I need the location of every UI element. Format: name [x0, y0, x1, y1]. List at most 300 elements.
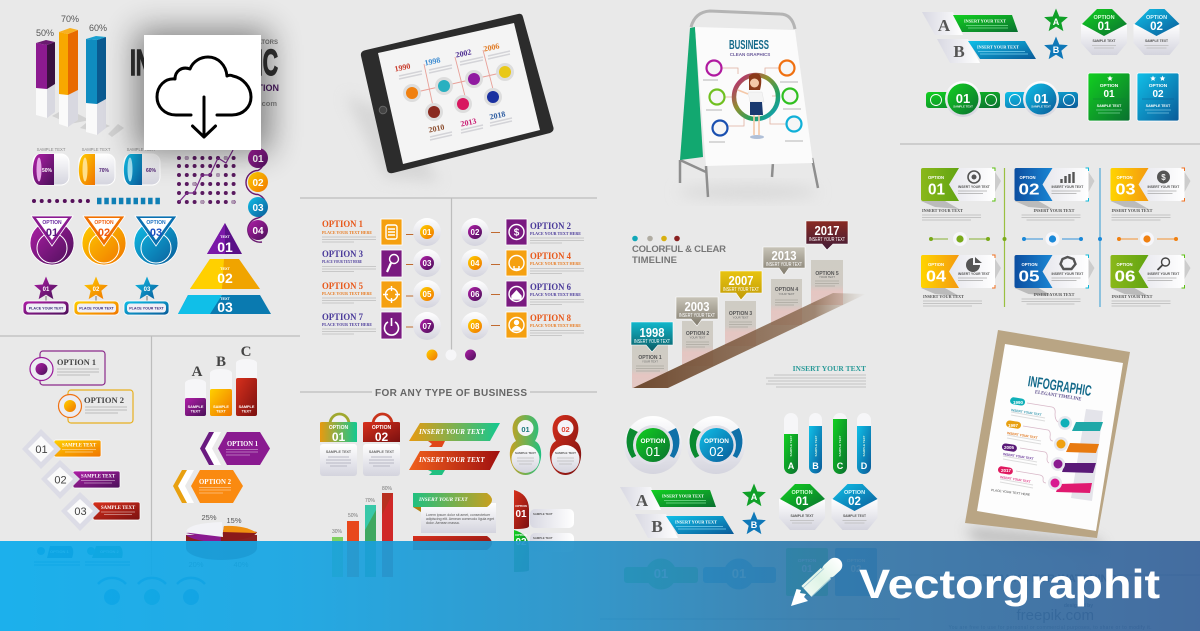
right option column: [530, 222, 581, 328]
pyramid chart: 02: [217, 270, 233, 286]
tablet screen: [378, 23, 540, 164]
panel: percentage cylinders: SAMPLE TEXT: [37, 147, 66, 152]
poster year pills: 1990: [1013, 400, 1024, 405]
panel: capsule chart A-D: [784, 413, 871, 474]
repeated option B banner: B: [651, 517, 663, 536]
tablet shadow: [345, 95, 440, 182]
icon: cloud download: [157, 57, 251, 137]
repeated star cards under banner: 01: [801, 564, 813, 575]
panel: option 1 and 2 outlined cards: OPTION 1: [57, 357, 96, 367]
pyramid chart: [178, 223, 271, 315]
panel: vertical tab list: 02: [515, 537, 527, 548]
option triangle badges: [30, 216, 178, 265]
panel: colorful timeline: OPTION 5: [815, 271, 839, 277]
option A banner: A: [938, 16, 951, 35]
bar label 50%: 50%: [36, 28, 54, 38]
winged circle green: 01: [956, 91, 970, 106]
star B: B: [1053, 45, 1060, 55]
card 05: OPTION: [1022, 262, 1038, 267]
sign green side panel: [680, 27, 703, 160]
panel: percentage cylinders: [33, 147, 160, 185]
panel: tag cards: SAMPLE TEXT: [369, 450, 395, 454]
star card option 01: [1088, 73, 1130, 121]
pyramid chart: TEXT: [220, 297, 231, 301]
panel: A B C cylinders: C: [241, 344, 251, 360]
star card option 02: 02: [1152, 89, 1164, 100]
card 05: [1014, 255, 1094, 304]
star labels: 02: [93, 287, 100, 293]
card 01: OPTION: [928, 175, 944, 180]
brand wordmark: Vectorgraphit: [859, 561, 1160, 607]
bar label 60%: 60%: [89, 23, 107, 33]
ghost content beneath banner: freepik.com: [1016, 607, 1094, 624]
hexagon option 01: 01: [1098, 21, 1111, 33]
panel: A/B options top right: [922, 8, 1180, 121]
repeated star B: [742, 512, 766, 534]
panel: tag cards: 02: [375, 430, 388, 444]
repeated hexagon 01: 01: [796, 496, 809, 508]
panel: colorful timeline: 2013: [772, 248, 796, 263]
winged circle blue: [1005, 81, 1078, 117]
panel: capsule chart A-D: SAMPLE TEXT: [814, 435, 818, 457]
poster year pills: 2005: [1004, 445, 1015, 450]
panel: options 1-8: [322, 218, 584, 360]
repeated star cards under banner: OPTION: [798, 558, 817, 564]
card 05: INSERT YOUR TEXT: [1052, 272, 1083, 276]
panel: peanut option shapes: SAMPLE TEXT: [515, 451, 536, 455]
ghost content beneath banner: OPTION 1: [50, 549, 69, 554]
pyramid chart: 03: [217, 299, 233, 315]
timeline caption: INSERT YOUR TEXT: [793, 364, 866, 373]
icon glyphs in squares: [383, 224, 524, 335]
option A banner: [922, 12, 1018, 35]
card 05: INSERT YOUR TEXT: [1034, 292, 1075, 297]
panel: tablet timeline mockup: [345, 14, 554, 182]
panel: A B C cylinders: SAMPLE: [188, 405, 204, 409]
pagination dots: [426, 350, 476, 360]
panel: colorful timeline: 1998: [640, 325, 664, 340]
repeated star A: A: [751, 492, 758, 502]
repeated option A banner: INSERT YOUR TEXT: [662, 494, 704, 498]
panel: vertical tab list: OPTION: [515, 533, 527, 537]
bottom banner: [0, 541, 1200, 631]
tablet timeline: 2018: [489, 109, 506, 122]
numbered circles: [413, 218, 489, 340]
card 01: INSERT YOUR TEXT: [922, 208, 963, 213]
poster year pills: [997, 397, 1026, 475]
option B banner: [937, 39, 1036, 63]
card 01: [921, 168, 1001, 220]
left option column: OPTION 5: [322, 282, 363, 292]
panel: colorful timeline: OPTION 2: [686, 331, 709, 337]
poster captions: [991, 408, 1045, 497]
panel: colorful timeline: INSERT YOUR TEXT: [766, 262, 802, 268]
heading behind the download overlay: ILLUSTRATORS: [232, 40, 278, 46]
star A: A: [1053, 17, 1060, 27]
option triangle badges: OPTION: [146, 220, 166, 226]
legend dots: [632, 236, 680, 241]
hexagon option 01: OPTION: [1093, 15, 1115, 21]
panel: tag cards: SAMPLE TEXT: [326, 450, 352, 454]
timeline caption: [766, 364, 866, 387]
star card option 01: OPTION: [1100, 83, 1119, 89]
panel: capsule chart A-D: D: [861, 461, 868, 471]
kraft board: [965, 330, 1130, 538]
panel: A B C cylinders: TEXT: [216, 410, 227, 414]
panel: options 1-8: 01: [423, 228, 432, 237]
panel: options 1-8: 05: [423, 290, 432, 299]
panel: colorful timeline: 2003: [684, 299, 710, 314]
dot matrix line chart: [179, 150, 236, 204]
repeated hexagon 01: [779, 484, 825, 530]
panel: 3D percentage bars: [36, 14, 124, 137]
card 06: OPTION: [1116, 262, 1133, 267]
star card option 02: [1137, 73, 1179, 121]
sign heading: BUSINESS: [729, 37, 769, 52]
timeline heading: TIMELINE: [632, 255, 677, 266]
poster ribbons: [1048, 416, 1103, 493]
panel: capsule chart A-D: SAMPLE TEXT: [862, 435, 866, 457]
icon: pencil logo: [791, 565, 835, 606]
panel: percentage cylinders: 50%: [42, 168, 53, 174]
card 03: INSERT YOUR TEXT: [1112, 208, 1153, 213]
panel: diamond numbered tags: [22, 429, 140, 531]
heading behind the download overlay: [130, 40, 279, 108]
option triangle badges: 01: [46, 227, 58, 239]
panel: options 1-8: 04: [471, 259, 480, 268]
panel: insert your text cards: adipiscing elit. Aenean commodo ligula eget: [426, 517, 494, 521]
card 06: INSERT YOUR TEXT: [1112, 294, 1153, 299]
card 04: 04: [926, 268, 946, 286]
repeated star A: [742, 484, 766, 506]
panel: peanut option shapes: [510, 415, 581, 475]
panel: diamond numbered tags: SAMPLE TEXT: [81, 474, 116, 480]
panel: option 1 and 2 outlined cards: [30, 351, 133, 423]
ghost content beneath banner: [34, 546, 1200, 631]
card 03: OPTION: [1116, 175, 1133, 180]
star card option 02: OPTION: [1149, 83, 1168, 89]
numbered serpentine steps 01-04: [246, 147, 268, 242]
right option column: OPTION 2: [530, 222, 571, 232]
pyramid chart: TEXT: [220, 235, 231, 239]
card 03: 03: [1116, 182, 1136, 198]
panel: vertical tab list: 01: [515, 509, 527, 520]
card 01: INSERT YOUR TEXT: [958, 185, 990, 189]
card 04: INSERT YOUR TEXT: [958, 272, 990, 276]
panel: options 1-8: 06: [471, 290, 480, 299]
star A: [1044, 8, 1068, 31]
poster subheading: ELEGANT TIMELINE: [1034, 390, 1082, 403]
tablet timeline: 2013: [460, 116, 477, 129]
star labels: 01: [43, 287, 50, 293]
card 04: [921, 255, 1001, 306]
repeated option B banner: [635, 514, 734, 538]
poster captions: INSERT YOUR TEXT: [1007, 431, 1038, 440]
repeated option B banner: INSERT YOUR TEXT: [675, 520, 717, 524]
panel: insert ribbons: INSERT YOUR TEXT: [418, 428, 485, 436]
panel: tag cards: 01: [332, 430, 345, 444]
left option column: OPTION 3: [322, 250, 363, 260]
repeated hexagon 02: [832, 484, 878, 530]
panel: colorful timeline: YOUR TEXT: [690, 336, 706, 340]
sign option circles: [706, 60, 802, 136]
sign metal frame: [691, 11, 795, 29]
right option column: OPTION 4: [530, 252, 571, 262]
left option column: [322, 220, 372, 327]
panel: tag cards: OPTION: [372, 425, 391, 431]
star card option 01: SAMPLE TEXT: [1097, 104, 1122, 108]
card 03: $: [1161, 173, 1166, 182]
panel: colorful timeline: INSERT YOUR TEXT: [723, 287, 759, 293]
paper sheet: [977, 344, 1123, 531]
star labels: PLACE YOUR TEXT: [29, 306, 64, 310]
repeated hexagon 01: SAMPLE TEXT: [790, 514, 814, 518]
section dividers: [0, 144, 1200, 575]
hexagon option 02: [1134, 9, 1180, 55]
poster shadow: [965, 528, 1105, 552]
ghost content beneath banner: THANKS FOR WATCHING: [983, 573, 1117, 585]
panel: vertical tab list: OPTION: [515, 504, 527, 508]
panel: insert ribbons: INSERT YOUR TEXT: [418, 456, 485, 464]
poster captions: PLACE YOUR TEXT HERE: [991, 488, 1030, 497]
panel: ring option circles: 02: [709, 444, 724, 459]
pyramid chart: TEXT: [220, 267, 231, 271]
panel: percent bar chart: 30%: [332, 529, 343, 535]
sign presenter figure: [738, 73, 764, 139]
panel: A-frame sign mockup: [678, 11, 818, 199]
poster year pills: 2017: [1001, 468, 1012, 473]
pyramid chart: 01: [217, 239, 233, 255]
card 05: 05: [1018, 268, 1040, 286]
panel: colorful timeline: YOUR TEXT: [642, 360, 658, 364]
hexagon option 02: OPTION: [1146, 15, 1167, 21]
card 02: INSERT YOUR TEXT: [1052, 185, 1083, 189]
star card option 01: 01: [1103, 89, 1115, 100]
numbered serpentine steps 01-04: 04: [252, 226, 264, 237]
panel: colorful timeline: [631, 221, 866, 388]
star labels: PLACE YOUR TEXT: [79, 306, 115, 310]
tablet timeline: 2002: [455, 47, 472, 60]
download overlay card: [144, 35, 261, 150]
panel: ring option circles: OPTION: [641, 438, 666, 445]
repeated option A banner: A: [636, 491, 649, 510]
right option column: OPTION 8: [530, 314, 571, 324]
panel: ring option circles: OPTION: [704, 438, 729, 445]
poster year pills: 1997: [1008, 423, 1019, 428]
right option column: OPTION 6: [530, 283, 571, 293]
year flags: [631, 221, 848, 352]
panel: percentage cylinders: SAMPLE TEXT: [82, 147, 111, 152]
sign connectors: [722, 68, 786, 126]
heading behind the download overlay: .com: [259, 99, 277, 108]
repeated winged circles under banner: 01: [654, 566, 668, 581]
left option column: OPTION 7: [322, 313, 363, 323]
timeline diagonal band: [633, 293, 866, 388]
panel: capsule chart A-D: C: [837, 461, 844, 471]
numbered serpentine steps 01-04: 03: [252, 203, 264, 214]
panel: colorful timeline: OPTION 3: [729, 311, 752, 317]
panel: diamond numbered tags: 01: [35, 444, 48, 456]
option triangle badges: OPTION: [94, 220, 114, 226]
panel: A B C cylinders: TEXT: [191, 410, 201, 414]
connector dots: [929, 232, 1178, 246]
sign board: [695, 27, 813, 166]
star card option 02: SAMPLE TEXT: [1146, 104, 1171, 108]
tablet body: [361, 14, 554, 173]
card 03: [1110, 168, 1190, 220]
panel: insert your text cards: Lorem ipsum dolor sit amet, consectetuer: [426, 513, 491, 517]
card 06: 06: [1114, 268, 1136, 286]
left option column: PLACE YOUR TEXT HERE: [322, 291, 372, 296]
panel: colorful timeline: OPTION 1: [638, 355, 662, 361]
card 04: OPTION: [928, 262, 944, 267]
panel: A B C cylinders: SAMPLE: [213, 405, 229, 409]
panel: percentage cylinders: 70%: [99, 168, 110, 174]
option triangle badges: OPTION: [42, 220, 62, 226]
tablet timeline: 2006: [483, 41, 500, 54]
winged circle blue: 01: [1034, 91, 1048, 106]
poster captions: INSERT YOUR TEXT: [1011, 408, 1042, 417]
repeated star cards under banner: 02: [850, 564, 862, 575]
repeated hexagon 01: OPTION: [791, 490, 813, 496]
repeated hexagon 02: 02: [848, 496, 861, 508]
sign ring: [734, 75, 778, 119]
panel: capsule chart A-D: SAMPLE TEXT: [838, 435, 842, 457]
panel: diamond numbered tags: SAMPLE TEXT: [62, 444, 97, 448]
panel: colorful timeline: YOUR TEXT: [819, 275, 835, 279]
hexagon option 01: SAMPLE TEXT: [1092, 39, 1116, 43]
panel: tag cards: [320, 414, 400, 476]
card 06: INSERT YOUR TEXT: [1148, 272, 1179, 276]
panel: hexagon options with chevrons: OPTION 2: [199, 478, 231, 486]
panel: vertical tab list: [514, 490, 574, 572]
card 02: INSERT YOUR TEXT: [1034, 208, 1075, 213]
poster cylinder: [1071, 409, 1103, 501]
tablet timeline: 1990: [394, 61, 411, 74]
tablet timeline: 2010: [428, 122, 445, 135]
card 02: OPTION: [1020, 175, 1036, 180]
panel: A B C cylinders: SAMPLE: [239, 405, 255, 409]
repeated winged circles under banner: 01: [732, 566, 746, 581]
sign subheading: CLEAN GRAPHICS: [730, 52, 770, 57]
icon squares: [381, 219, 527, 339]
repeated hexagon 02: SAMPLE TEXT: [843, 514, 866, 518]
panel: insert your text cards: [413, 493, 496, 574]
star B: [1044, 36, 1068, 59]
panel: colorful timeline: 2017: [814, 223, 840, 238]
panel: tag cards: OPTION: [329, 425, 348, 431]
panel: vertical tab list: SAMPLE TEXT: [533, 536, 553, 540]
right option column: PLACE YOUR TEXT HERE: [530, 292, 581, 297]
card 01: 01: [928, 182, 945, 198]
card 03: INSERT YOUR TEXT: [1148, 185, 1179, 189]
panel: colorful timeline: YOUR TEXT: [733, 316, 749, 320]
panel: colorful timeline: OPTION 4: [775, 287, 798, 293]
timeline heading: COLORFUL & CLEAR: [632, 244, 726, 255]
panel: A B C cylinders: [185, 344, 257, 416]
sign legs: [680, 158, 818, 197]
panel: 3D pie chart: 25%: [201, 513, 217, 522]
bar label 70%: 70%: [61, 14, 79, 24]
progress dots and squares: [34, 199, 160, 203]
panel: insert your text cards: INSERT YOUR TEXT: [418, 497, 468, 503]
panel: hexagon options with chevrons: [173, 432, 270, 503]
heading: for any type of business: FOR ANY TYPE OF BUSINESS: [375, 388, 527, 399]
tablet home button: [379, 106, 387, 114]
numbered serpentine steps 01-04: 01: [252, 154, 264, 165]
panel: capsule chart A-D: SAMPLE TEXT: [789, 435, 793, 457]
repeated star B: B: [751, 520, 758, 530]
left option column: PLACE YOUR TEXT HERE: [322, 259, 362, 264]
panel: A B C cylinders: TEXT: [242, 410, 252, 414]
panel: options 1-8: 08: [471, 322, 480, 331]
panel: colorful timeline: INSERT YOUR TEXT: [809, 237, 845, 243]
left option column: PLACE YOUR TEXT HERE: [322, 230, 372, 235]
panel: percent bar chart: 80%: [382, 486, 393, 492]
panel: insert your text cards: dolor. Aenean massa.: [426, 521, 460, 525]
sign small captions: [703, 80, 803, 142]
panel: peanut option shapes: SAMPLE TEXT: [555, 451, 576, 455]
star labels: 03: [144, 287, 151, 293]
poster connectors: [1016, 403, 1058, 483]
heading behind the download overlay: INFOGRAPHIC: [130, 42, 278, 83]
repeated option A banner: [620, 487, 716, 510]
panel: poster mockup: [965, 330, 1130, 552]
right option column: PLACE YOUR TEXT HERE: [530, 231, 581, 236]
card 04: INSERT YOUR TEXT: [923, 294, 964, 299]
panel: hexagon options with chevrons: OPTION 1: [227, 440, 258, 448]
panel: ring option circles: 01: [646, 444, 660, 459]
panel: diamond numbered tags: 03: [74, 506, 87, 518]
panel: percentage cylinders: SAMPLE TEXT: [127, 147, 156, 152]
poster heading: INFOGRAPHIC: [1027, 373, 1093, 400]
panel: colorful timeline: 2007: [728, 273, 754, 288]
ghost content beneath banner: designed by: [1064, 603, 1093, 609]
panel: diamond numbered tags: 02: [54, 474, 67, 486]
repeated star cards under banner: OPTION: [847, 558, 866, 564]
panel: colorful timeline: INSERT YOUR TEXT: [634, 339, 670, 345]
panel: 3D pie chart: [186, 513, 257, 569]
panel: ring option circles: [624, 416, 745, 474]
panel: 3D pie chart: 40%: [233, 560, 249, 569]
panel: peanut option shapes: 02: [561, 425, 570, 434]
panel: percent bar chart: 50%: [348, 513, 359, 519]
left option column: OPTION 1: [322, 220, 363, 230]
panel: percent bar chart: 70%: [365, 498, 376, 504]
panel: colorful timeline: INSERT YOUR TEXT: [679, 313, 715, 319]
panel: options 1-8: 03: [423, 259, 432, 268]
hexagon option 02: SAMPLE TEXT: [1145, 39, 1168, 43]
option B banner: B: [953, 42, 965, 61]
card 06: [1110, 255, 1190, 306]
panel: insert ribbons: [409, 423, 500, 475]
option triangle badges: 02: [98, 227, 110, 239]
ghost content beneath banner: You are free to use for personal or commercial purposes, to share or to modify it.: [948, 625, 1152, 631]
repeated hexagon 02: OPTION: [844, 490, 865, 496]
winged circle green: [926, 81, 1000, 117]
tablet timeline: [394, 41, 514, 140]
timeline columns: [632, 260, 843, 388]
left option column: PLACE YOUR TEXT HERE: [322, 322, 372, 327]
panel: six numbered option cards: [921, 168, 1190, 307]
connectors: [406, 232, 500, 327]
panel: capsule chart A-D: B: [812, 461, 819, 471]
hexagon option 01: [1081, 9, 1127, 55]
poster captions: INSERT YOUR TEXT: [1000, 475, 1031, 484]
panel: vertical tab list: SAMPLE TEXT: [533, 512, 553, 516]
hexagon option 02: 02: [1150, 21, 1163, 33]
heading behind the download overlay: COLLECTION: [220, 83, 279, 93]
